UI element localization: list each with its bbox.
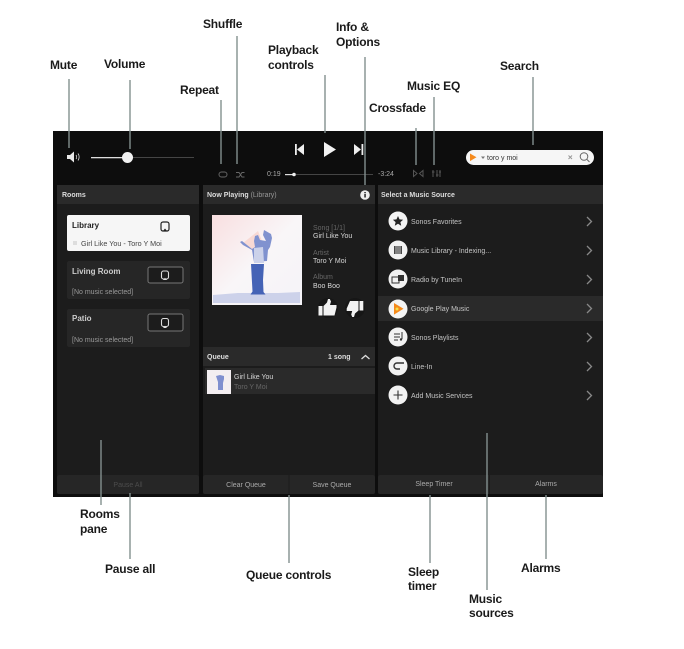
album art <box>212 215 302 305</box>
callout: Mute <box>50 58 78 148</box>
callout: Info and Options: Options <box>336 35 380 49</box>
now playing header <box>203 185 375 204</box>
callout: Volume <box>104 57 146 149</box>
callout: Mute: Mute <box>50 58 78 72</box>
music source header: Select a Music Source <box>381 192 455 199</box>
callout: Rooms pane: Rooms <box>80 507 120 521</box>
icon: thumbs down <box>345 298 365 318</box>
sleep timer and alarms buttons: Sleep Timer <box>415 481 453 488</box>
source: Music Library: Music Library - Indexing... <box>411 248 491 255</box>
source: Sonos Playlists: Sonos Playlists <box>411 335 459 342</box>
sleep timer and alarms buttons <box>378 475 603 494</box>
queue controls <box>203 475 375 494</box>
sleep timer and alarms buttons: Alarms <box>535 481 557 488</box>
queue item: Toro Y Moi <box>234 384 268 391</box>
callout: Playback controls <box>268 43 325 133</box>
callout: Music EQ: Music EQ <box>407 79 460 93</box>
queue item <box>205 368 375 394</box>
callout: Alarms: Alarms <box>521 561 561 575</box>
progress bar <box>267 171 394 178</box>
rooms header: Rooms <box>62 192 86 199</box>
music source header <box>378 185 603 204</box>
track metadata: Song [1/1] <box>313 225 345 232</box>
source: Google Play Music (selected) <box>378 296 603 321</box>
callout: Search <box>500 59 539 145</box>
queue header: 1 song <box>328 354 351 361</box>
source: Sonos Favorites <box>388 212 592 230</box>
callout: Playback controls: controls <box>268 58 314 72</box>
search box: toro y moi <box>487 155 518 162</box>
callout: Sleep timer: Sleep <box>408 565 439 579</box>
callout: Shuffle: Shuffle <box>203 17 243 31</box>
icon: thumbs up <box>318 298 338 318</box>
queue header <box>203 347 375 366</box>
callout: Music sources <box>469 433 514 620</box>
app window <box>53 131 603 497</box>
room card: Living Room <box>67 261 190 299</box>
callout: Info and Options <box>336 20 380 185</box>
room card: Patio <box>67 309 190 347</box>
panel: now playing <box>203 185 375 494</box>
callout: Info and Options: Info & <box>336 20 369 34</box>
search box <box>466 150 594 165</box>
track metadata <box>313 225 352 290</box>
progress bar: 0:19 <box>267 171 281 178</box>
queue controls: Clear Queue <box>226 482 266 489</box>
callout: Repeat: Repeat <box>180 83 219 97</box>
source: Music Library <box>388 240 592 260</box>
volume slider <box>91 152 194 163</box>
callout: Rooms pane <box>80 440 120 536</box>
callout: Volume: Volume <box>104 57 146 71</box>
callout: Rooms pane: pane <box>80 522 108 536</box>
track metadata: Boo Boo <box>313 283 340 290</box>
source: Line-In <box>388 356 592 376</box>
icon: speaker <box>67 152 79 162</box>
track metadata: Artist <box>313 250 329 257</box>
icon: repeat <box>219 172 227 177</box>
icon: shuffle <box>236 172 244 177</box>
callout: Queue controls: Queue controls <box>246 568 332 582</box>
panel: music sources <box>378 185 603 494</box>
callout: Pause all: Pause all <box>105 562 155 576</box>
callout: Playback controls: Playback <box>268 43 319 57</box>
track metadata: Girl Like You <box>313 233 352 240</box>
callout: Music EQ <box>407 79 460 165</box>
callout: Sleep timer: timer <box>408 579 437 593</box>
queue header: Queue <box>207 354 229 361</box>
room card: Living Room: [No music selected] <box>72 289 133 296</box>
room card: Living Room: Living Room <box>72 267 120 276</box>
callout: Queue controls <box>246 495 332 582</box>
source: Radio by TuneIn: Radio by TuneIn <box>411 277 462 284</box>
room card: Library: Girl Like You - Toro Y Moi <box>81 239 162 248</box>
panel: rooms <box>57 185 199 494</box>
room card: Library <box>67 215 190 251</box>
source: Google Play Music (selected): Google Play Music <box>411 306 470 313</box>
room card: Library: Library <box>72 221 100 230</box>
callout: Pause all <box>105 493 155 576</box>
pause all button <box>57 475 199 494</box>
icon: music EQ <box>432 170 441 177</box>
source: Add Music Services: Add Music Services <box>411 393 473 400</box>
callout: Search: Search <box>500 59 539 73</box>
callout: Sleep timer <box>408 495 439 593</box>
callout: Music sources: sources <box>469 606 514 620</box>
icon: crossfade <box>414 170 423 176</box>
callout: Alarms <box>521 495 561 575</box>
queue item: Girl Like You <box>234 374 273 381</box>
source: Add Music Services <box>388 386 592 404</box>
room card: Patio: Patio <box>72 314 92 323</box>
source: Line-In: Line-In <box>411 364 433 371</box>
pause all button: Pause All <box>113 482 143 489</box>
track metadata: Toro Y Moi <box>313 258 347 265</box>
source: Sonos Favorites: Sonos Favorites <box>411 219 462 226</box>
source: Sonos Playlists <box>388 328 592 346</box>
queue controls: Save Queue <box>313 482 352 489</box>
track metadata: Album <box>313 274 333 281</box>
callout: Repeat <box>180 83 221 164</box>
rooms header <box>57 185 199 204</box>
icon: info <box>360 190 370 200</box>
callout: Crossfade: Crossfade <box>369 101 426 115</box>
callout: Crossfade <box>369 101 426 165</box>
progress bar: -3:24 <box>378 171 394 178</box>
playback controls <box>295 142 363 157</box>
source: Radio by TuneIn <box>388 270 592 288</box>
now playing header: Now Playing (Library) <box>207 192 277 199</box>
callout: Music sources: Music <box>469 592 503 606</box>
room card: Patio: [No music selected] <box>72 337 133 344</box>
